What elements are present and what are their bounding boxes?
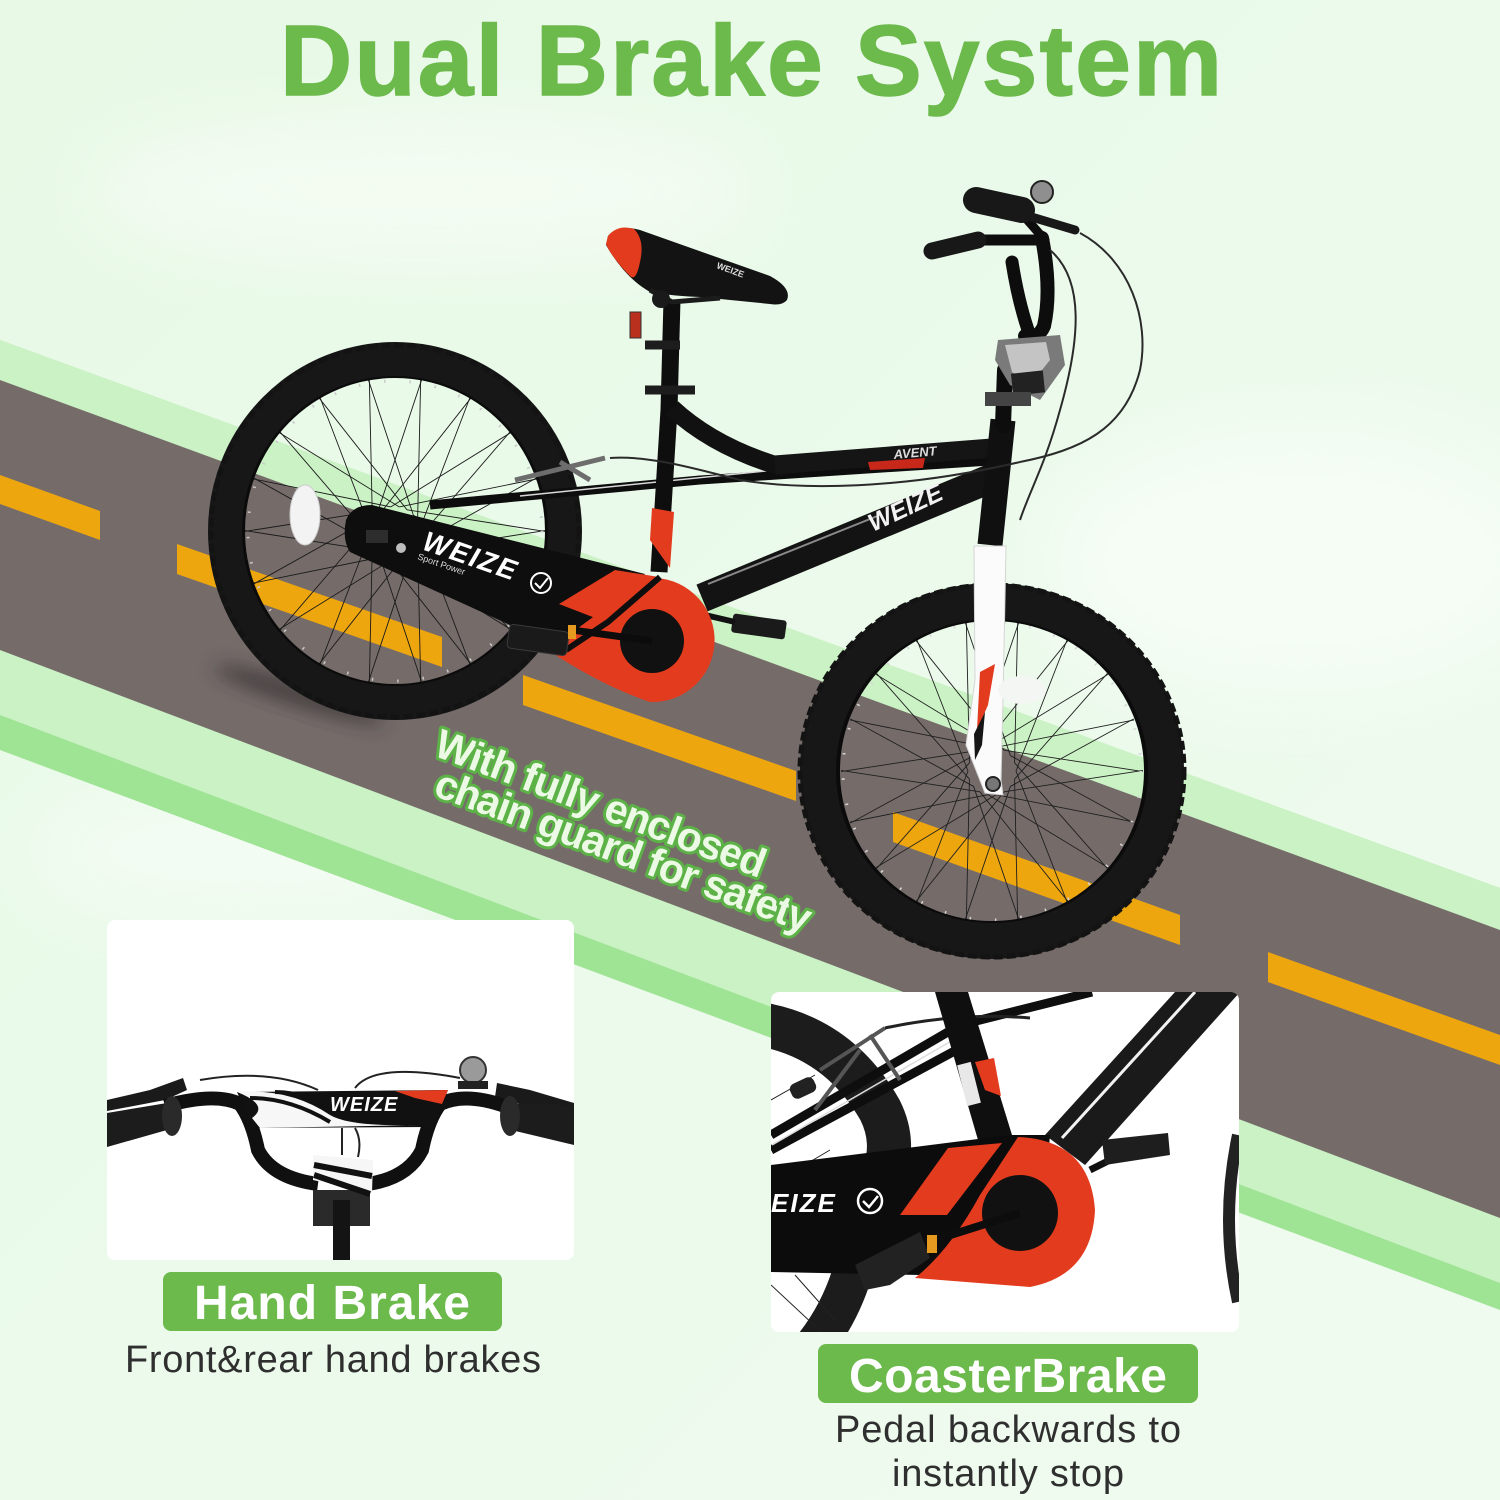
text: coaster brake description: Pedal backwards to (835, 1409, 1181, 1451)
check badge (531, 573, 551, 593)
saddle (606, 228, 788, 308)
fork decal (977, 664, 995, 730)
seat reflector (630, 312, 641, 338)
title: Dual Brake System (280, 5, 1222, 117)
road with green verges (0, 340, 1500, 1310)
top tube (775, 448, 992, 465)
handlebar tubes (165, 1098, 505, 1184)
check badge (858, 1189, 882, 1213)
text: hand brake description: Front&rear hand brakes (125, 1339, 541, 1381)
bell (1031, 181, 1053, 203)
rear brake (515, 458, 605, 480)
bicycle (211, 181, 1184, 957)
chain stays (430, 461, 990, 505)
front wheel (800, 585, 1184, 957)
grips (107, 1096, 574, 1147)
front reflector (998, 676, 1046, 704)
text: coaster brake description (835, 1409, 1181, 1495)
guard slot (366, 530, 388, 543)
rear brake (788, 1016, 1030, 1110)
chain guard (345, 505, 715, 702)
top tube label: AVENT (892, 443, 938, 462)
frame brand: WEIZE (864, 478, 948, 537)
pad brand: WEIZE (330, 1094, 398, 1116)
curved brace (672, 408, 785, 468)
down tube (702, 478, 992, 598)
seat tube (935, 992, 1012, 1140)
spokes (771, 1074, 830, 1320)
guard brand: EIZE (771, 1188, 837, 1218)
seat tube decal (650, 508, 674, 568)
seat clamps (645, 345, 695, 390)
crossbar pad (237, 1090, 448, 1128)
rear tyre (765, 1025, 889, 1170)
front tyre edge (1229, 1135, 1238, 1302)
text: coaster brake description: instantly stop (892, 1453, 1124, 1495)
saddle brand: WEIZE (715, 260, 746, 280)
rear reflector (290, 485, 320, 545)
brake levers and clamp (985, 335, 1065, 406)
hub (982, 1175, 1058, 1251)
bell (458, 1057, 488, 1089)
down tube (1045, 992, 1240, 1165)
wheel shadow (211, 656, 389, 734)
road caption: With fully enclosed (429, 720, 773, 887)
label: hand brake: Hand Brake (194, 1277, 470, 1330)
front hub (986, 777, 1000, 791)
chain guard brand: WEIZE (419, 525, 522, 587)
cables (200, 1072, 460, 1157)
panel: hand brake photo (107, 920, 574, 1260)
crank and pedal (507, 624, 652, 656)
label: coaster brake: CoasterBrake (849, 1350, 1167, 1403)
chain guard (771, 1135, 1095, 1287)
far pedal (1090, 1133, 1170, 1170)
seat post and tube (659, 300, 672, 572)
road caption: chain guard for safety (429, 760, 818, 942)
chain stays (771, 992, 1092, 1150)
stem (313, 1155, 373, 1260)
far pedal (705, 613, 787, 640)
brake cables (610, 233, 1142, 520)
crank and near pedal (855, 1220, 986, 1290)
rear wheel (211, 345, 579, 717)
far levers (107, 1078, 574, 1111)
white fork (966, 546, 1006, 795)
panel: coaster brake photo (765, 992, 1240, 1345)
road centre dashes (0, 475, 1500, 1065)
grips (932, 200, 1075, 251)
stem and handlebar (980, 206, 1048, 425)
chain ring hub (620, 609, 684, 673)
chain guard tagline: Sport Power (416, 551, 466, 577)
head tube (990, 420, 1003, 545)
